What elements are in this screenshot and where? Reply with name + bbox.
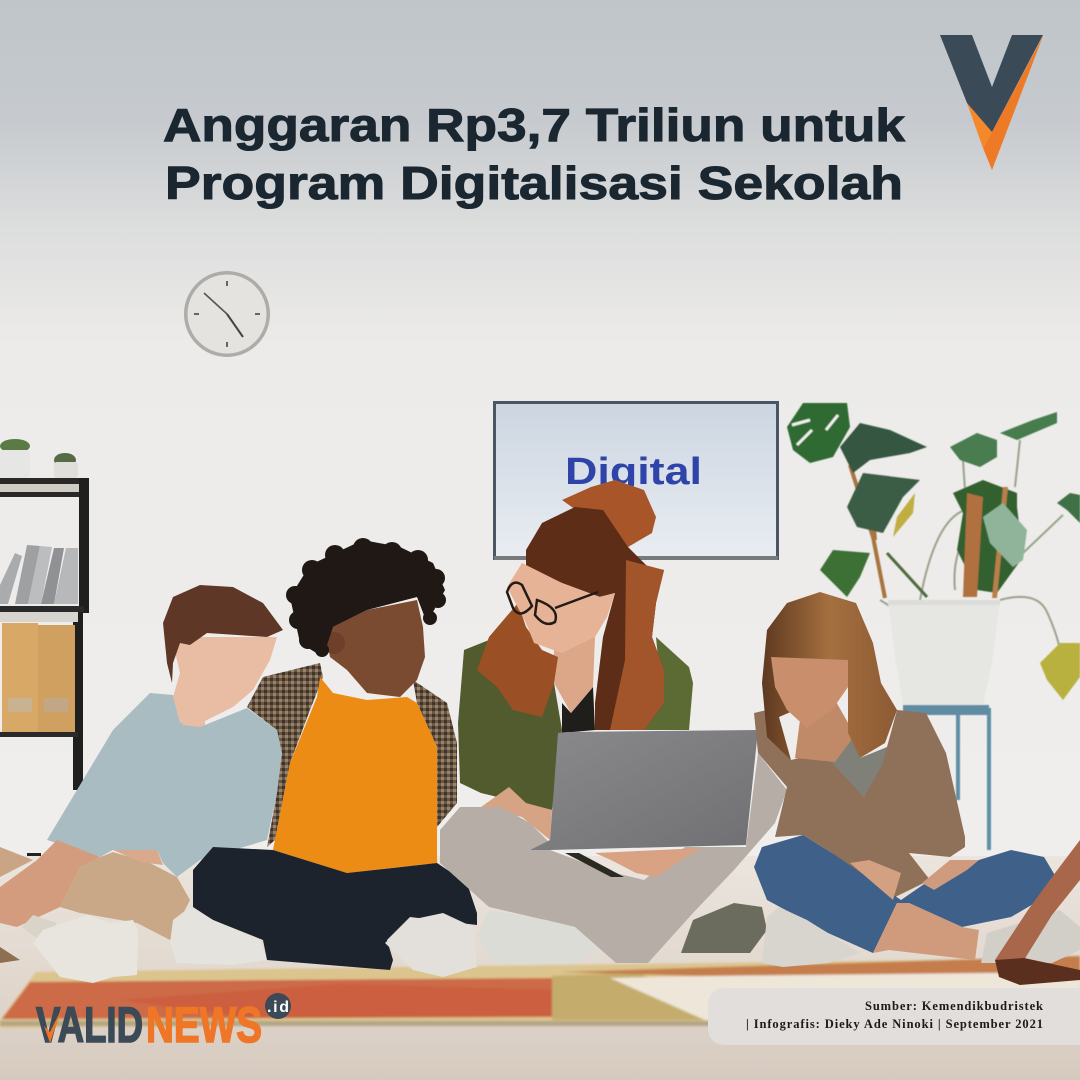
girl on the right (754, 592, 1080, 967)
source credits panel: Sumber: Kemendikbudristek (865, 999, 1043, 1013)
logo: V mark (940, 35, 1043, 170)
logo: VALIDNEWS wordmark (36, 993, 291, 1053)
background wall (0, 0, 1080, 860)
boy in orange shirt (170, 538, 477, 977)
boy on the left (0, 585, 283, 983)
rug (0, 956, 1080, 1028)
logo: VALIDNEWS wordmark: NEWS (146, 997, 262, 1053)
title: Program Digitalisasi Sekolah (165, 157, 903, 209)
wall-mounted TV screen: Digital (565, 451, 702, 493)
afro hair (286, 538, 446, 657)
brown bag corner (995, 840, 1080, 985)
logo: VALIDNEWS wordmark: .id (267, 999, 289, 1016)
plant in white pot on stool (787, 403, 1080, 850)
floor (0, 856, 1080, 1080)
title: Anggaran Rp3,7 Triliun untuk (163, 99, 905, 151)
woman with laptop (440, 480, 787, 963)
logo: VALIDNEWS wordmark: VALID (36, 997, 143, 1053)
source credits panel: | Infografis: Dieky Ade Ninoki | September 2021 (746, 1017, 1043, 1031)
wall-mounted TV screen (493, 401, 779, 560)
shelf with books and boxes (0, 439, 89, 856)
title (163, 99, 905, 209)
clock (184, 271, 270, 357)
source credits panel (708, 988, 1080, 1045)
